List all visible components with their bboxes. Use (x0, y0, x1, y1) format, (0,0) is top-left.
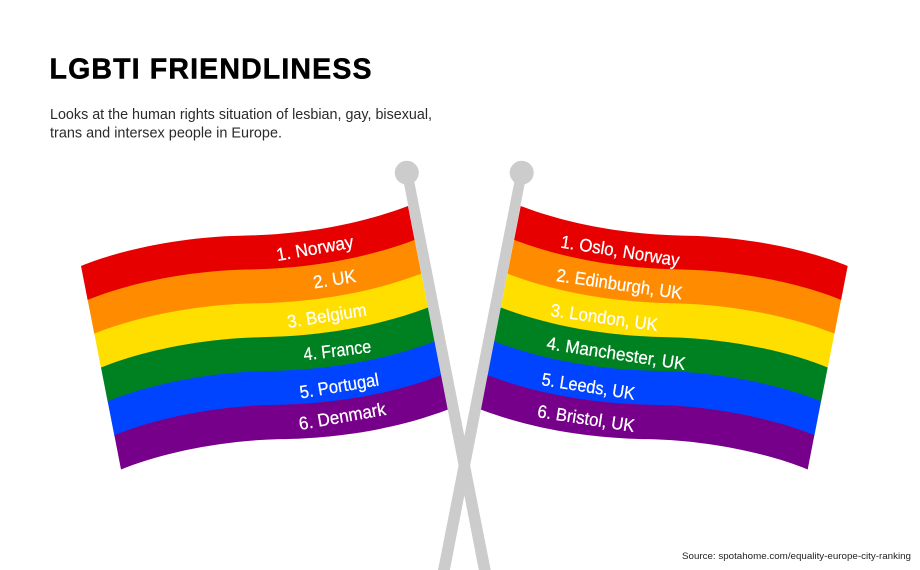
red stripe (81, 206, 415, 300)
blue stripe (487, 341, 821, 436)
red stripe (514, 206, 848, 300)
purple stripe (114, 375, 448, 469)
orange stripe (507, 240, 841, 334)
label: Belgium: 3. Belgium (286, 300, 368, 332)
blue stripe (108, 341, 441, 436)
yellow stripe (501, 274, 834, 368)
left pole (395, 161, 491, 570)
label: Bristol: 6. Bristol, UK (536, 401, 636, 436)
green stripe (101, 308, 435, 402)
label: Portugal: 5. Portugal (298, 370, 380, 402)
orange stripe (88, 240, 421, 334)
description: Looks at the human rights situation of lesbian, gay, bisexual, (50, 107, 432, 123)
flag poles (395, 161, 534, 570)
description (50, 107, 432, 142)
right flag: city ranking (481, 206, 848, 469)
source note: Source: spotahome.com/equality-europe-city-ranking (682, 551, 911, 562)
label: Manchester: 4. Manchester, UK (545, 333, 687, 374)
label: UK: 2. UK (312, 266, 357, 292)
label: Denmark: 6. Denmark (297, 399, 388, 434)
city labels (536, 232, 687, 436)
green stripe (494, 308, 828, 402)
label: Edinburgh: 2. Edinburgh, UK (555, 265, 684, 303)
label: Norway: 1. Norway (275, 232, 355, 265)
label: France: 4. France (302, 336, 372, 364)
country labels (275, 232, 388, 434)
left flag: country ranking (81, 206, 448, 469)
description: trans and intersex people in Europe. (50, 126, 282, 142)
right pole (438, 161, 534, 570)
yellow stripe (94, 274, 428, 368)
label: Leeds: 5. Leeds, UK (540, 369, 636, 404)
purple stripe (481, 375, 814, 469)
label: Oslo: 1. Oslo, Norway (559, 232, 681, 270)
label: London: 3. London, UK (549, 300, 659, 335)
title: LGBTI FRIENDLINESS (50, 54, 372, 86)
